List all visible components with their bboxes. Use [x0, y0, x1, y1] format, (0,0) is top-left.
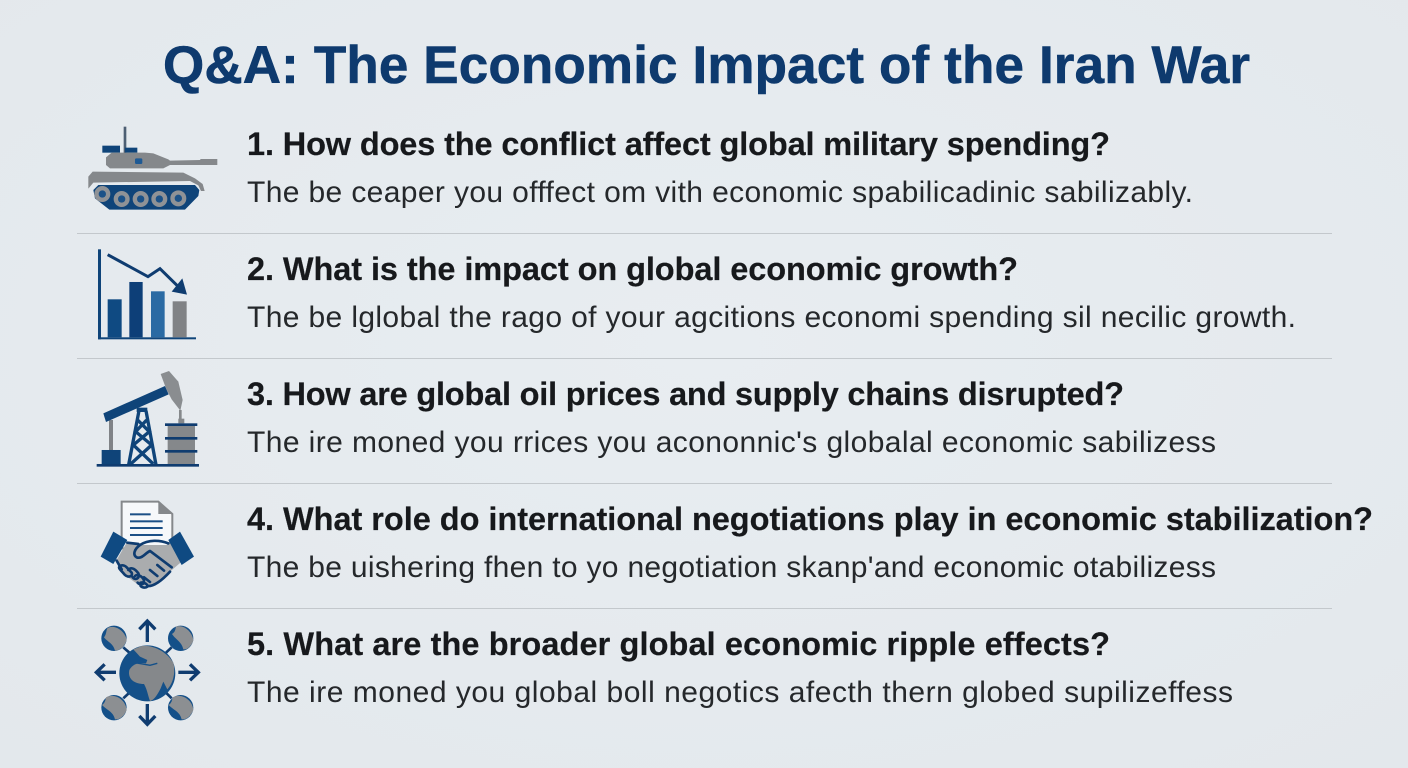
icon: globes with outward arrows [96, 621, 198, 724]
panel: question 1 military spending [88, 126, 1193, 210]
text: answer 5: The ire moned you global boll negotics afecth thern globed supilizeffess [247, 676, 1233, 709]
text: answer 3: The ire moned you rrices you acononnic's globalal economic sabilizess [247, 426, 1216, 459]
heading: question 5: 5. What are the broader global economic ripple effects? [247, 626, 1110, 662]
heading: question 1: 1. How does the conflict affect global military spending? [247, 126, 1110, 162]
heading: question 2: 2. What is the impact on global economic growth? [247, 251, 1018, 287]
icon: tank [88, 127, 217, 210]
panel: question 3 oil prices [97, 371, 1216, 467]
title: Q&A: The Economic Impact of the Iran War [163, 36, 1250, 95]
text: answer 2: The be lglobal the rago of your agcitions economi spending sil necilic growth. [247, 301, 1296, 334]
text: answer 4: The be uishering fhen to yo negotiation skanp'and economic otabilizess [247, 551, 1216, 584]
text: answer 1: The be ceaper you offfect om vith economic spabilicadinic sabilizably. [247, 176, 1193, 209]
icon: falling bar chart [98, 249, 196, 339]
panel: question 2 economic growth [98, 249, 1296, 339]
panel: question 5 ripple effects [96, 621, 1233, 724]
heading: question 3: 3. How are global oil prices and supply chains disrupted? [247, 376, 1124, 412]
heading: question 4: 4. What role do international negotiations play in economic stabilization? [247, 501, 1373, 537]
icon: oil pump and barrel [97, 371, 199, 467]
icon: document and handshake [101, 502, 194, 588]
panel: question 4 negotiations [101, 501, 1373, 588]
